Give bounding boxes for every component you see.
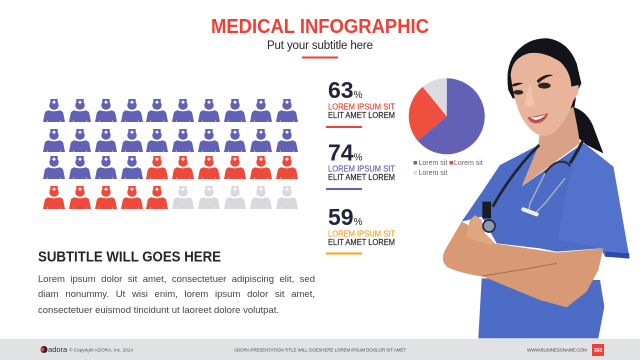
stat: 74%: LOREM IPSUM SIT — [328, 164, 395, 174]
stat: 74% — [326, 140, 395, 190]
title: MEDICAL INFOGRAPHIC — [211, 16, 429, 38]
scrubs sleeve shading — [558, 145, 629, 257]
pie legend — [414, 160, 483, 177]
stat: 74%: 74% — [328, 140, 363, 166]
stat: 59%: ELIT AMET LOREM — [328, 237, 395, 247]
face — [511, 53, 579, 136]
pie legend: Lorem sit — [418, 170, 447, 177]
stat: 59%: LOREM IPSUM SIT — [328, 228, 395, 238]
pie chart — [409, 78, 485, 154]
body paragraph — [38, 274, 315, 316]
footer website: WWW.BUSINESSNAME.COM — [527, 348, 587, 354]
crossed arms — [443, 222, 603, 307]
page number badge: 360 — [594, 348, 602, 354]
body paragraph: diam nonummy. Ut wisi enim, lorem ipsum dolor sit amet, — [38, 289, 315, 300]
body paragraph: Lorem ipsum dolor sit amet, consectetuer adipiscing elit, sed — [38, 274, 315, 284]
stat: 63%: LOREM IPSUM SIT — [328, 102, 395, 112]
footer logo: adora — [48, 345, 68, 354]
row 2 — [43, 129, 298, 152]
facial features — [512, 75, 553, 123]
scrubs — [462, 143, 629, 338]
sleeve shadow — [605, 252, 629, 259]
body paragraph: consectetuer euismod tincidunt ut laoreet dolore volutpat. — [38, 304, 279, 316]
stat: 74%: ELIT AMET LOREM — [328, 172, 395, 182]
title underline — [302, 56, 338, 58]
pie legend: Lorem sit — [454, 160, 483, 167]
page number badge — [592, 344, 604, 356]
hair and ponytail — [507, 38, 603, 153]
arm crease — [482, 263, 557, 276]
stat: 59%: 59% — [328, 204, 363, 230]
hand — [466, 215, 495, 245]
subtitle: Put your subtitle here — [267, 40, 373, 52]
row 1 — [43, 99, 298, 122]
pie legend: Lorem sit — [418, 160, 447, 167]
footer copyright: © Copyright ADORA, Inc. 2014 — [69, 346, 133, 352]
footer logo — [40, 345, 68, 354]
pictogram chart: nurse icons — [43, 99, 298, 209]
stat: 63% — [326, 77, 395, 128]
stat: 63%: 63% — [328, 77, 363, 103]
neck and chest — [522, 107, 580, 187]
stethoscope — [483, 140, 583, 232]
footer presentation title: ADORA PRESENTATION TITLE WILL GOESHERE LOREM IPSUM DOOLOR SIT AMET — [234, 348, 406, 352]
stat: 59% — [326, 204, 395, 254]
row 4 — [43, 186, 298, 209]
nurse illustration — [443, 38, 629, 338]
footer bar — [0, 339, 640, 360]
section heading: SUBTITLE WILL GOES HERE — [38, 250, 221, 266]
row 3 — [43, 156, 298, 179]
stat: 63%: ELIT AMET LOREM — [328, 110, 395, 120]
